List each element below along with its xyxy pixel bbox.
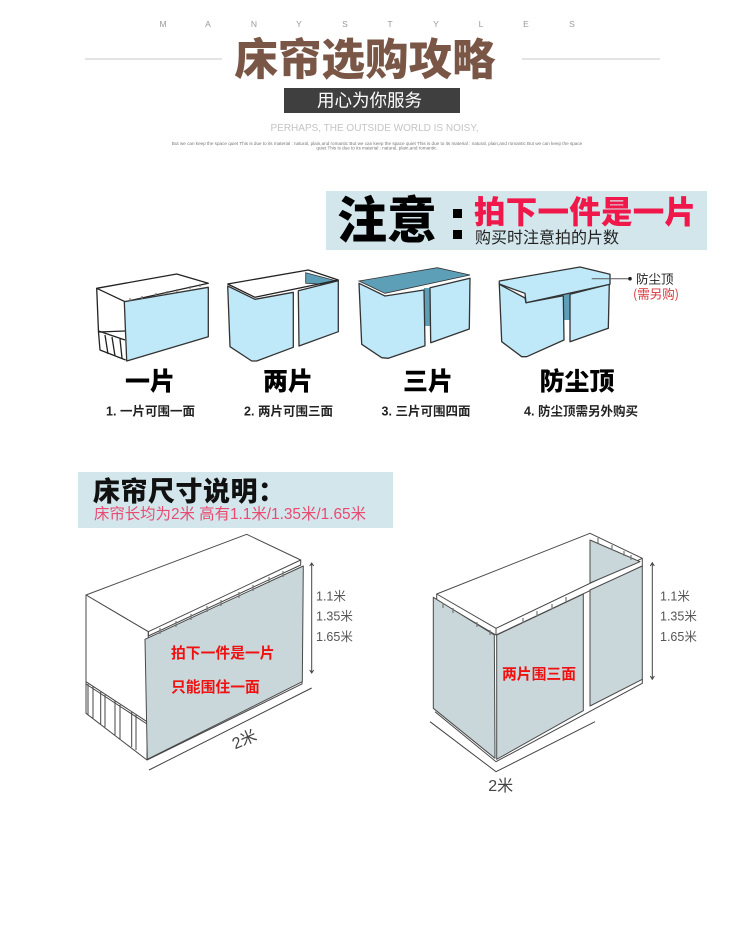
red warning: 拍下一件是一片 xyxy=(474,187,696,233)
red note one: 拍下一件是一片 xyxy=(171,642,275,663)
left curtain xyxy=(433,597,495,758)
spaced caption: many styles: S xyxy=(569,19,575,29)
bottom frame xyxy=(435,679,642,762)
captions: piece descriptions: 2. 两片可围三面 xyxy=(244,404,333,418)
width arrows xyxy=(430,722,595,772)
height labels: 1.65米 xyxy=(316,630,353,644)
spaced caption: many styles xyxy=(159,19,575,29)
width label: 2米 xyxy=(229,727,259,753)
spaced caption: many styles: L xyxy=(479,19,484,29)
height labels: 1.35米 xyxy=(316,610,353,624)
captions: piece descriptions: 4. 防尘顶需另外购买 xyxy=(524,404,638,418)
red note: 两片围三面 xyxy=(502,663,576,684)
labels: piece names: 两片 xyxy=(263,362,313,398)
captions: piece descriptions: 3. 三片可围四面 xyxy=(382,404,470,418)
middle curtain xyxy=(497,594,583,759)
captions: piece descriptions xyxy=(106,404,638,418)
fine print: quiet This is due to its material : natural, plain,and romantic. xyxy=(316,146,438,150)
diagram: dust cover xyxy=(499,267,610,357)
size subtext: 床帘长均为2米 高有1.1米/1.35米/1.65米 xyxy=(94,505,366,523)
labels: piece names: 防尘顶 xyxy=(539,362,615,398)
spaced caption: many styles: E xyxy=(523,19,529,29)
subtitle badge xyxy=(284,88,460,113)
size banner xyxy=(78,470,393,528)
title right rule xyxy=(522,58,660,60)
spaced caption: many styles: N xyxy=(251,19,257,29)
hooks xyxy=(443,538,631,635)
dust cover callout xyxy=(592,268,679,302)
spaced caption: many styles: M xyxy=(159,19,167,29)
attention heading: 注意 xyxy=(337,181,437,253)
spaced caption: many styles: T xyxy=(387,19,393,29)
height labels: 1.35米 xyxy=(660,610,697,624)
labels: piece names xyxy=(125,362,615,398)
banner subtext: 购买时注意拍的片数 xyxy=(475,224,619,248)
diagram: one-piece size xyxy=(86,534,353,770)
hooks xyxy=(160,571,283,634)
bed frame xyxy=(86,534,302,760)
fine print: But we can keep the space quiet This is due to its material : natural, plain,and romantic But we can keep the space quiet This is due to its material : natural, plain,and romantic But we can keep the space xyxy=(172,141,583,146)
subtitle badge: 用心为你服务 xyxy=(317,88,422,112)
spaced caption: many styles: Y xyxy=(296,19,302,29)
size heading: 床帘尺寸说明： xyxy=(93,470,285,509)
grey curtain panel xyxy=(145,566,303,759)
width label: 2米 xyxy=(488,777,513,795)
width arrow xyxy=(149,688,312,770)
height labels: 1.1米 xyxy=(316,590,346,604)
diagram: one piece xyxy=(97,274,208,361)
bed top xyxy=(437,533,642,635)
height labels xyxy=(316,590,353,644)
fine print xyxy=(172,141,583,150)
back curtain xyxy=(590,540,640,583)
diagram: two-piece size xyxy=(430,533,697,795)
labels: piece names: 一片 xyxy=(125,362,175,398)
height labels: 1.1米 xyxy=(660,590,690,604)
dust cover callout: (需另购) xyxy=(633,284,679,302)
right curtain xyxy=(590,566,642,706)
diagram: two pieces xyxy=(228,270,338,361)
spaced caption: many styles: Y xyxy=(433,19,439,29)
height arrow xyxy=(650,563,654,679)
height labels: 1.65米 xyxy=(660,630,697,644)
captions: piece descriptions: 1. 一片可围一面 xyxy=(106,404,195,418)
height labels xyxy=(660,590,697,644)
english tagline: PERHAPS, THE OUTSIDE WORLD IS NOISY, xyxy=(270,123,479,134)
spaced caption: many styles: S xyxy=(342,19,348,29)
header xyxy=(85,19,660,150)
height arrow xyxy=(310,563,314,673)
title left rule xyxy=(85,58,222,60)
dust cover callout: 防尘顶 xyxy=(636,268,674,288)
attention banner xyxy=(326,181,707,253)
banner background xyxy=(326,191,707,250)
colon xyxy=(453,209,462,239)
diagram: three pieces xyxy=(359,268,470,358)
spaced caption: many styles: A xyxy=(205,19,211,29)
title: 床帘选购攻略 xyxy=(234,25,496,88)
size banner background xyxy=(78,472,393,528)
labels: piece names: 三片 xyxy=(403,362,453,398)
red note two: 只能围住一面 xyxy=(171,676,260,697)
